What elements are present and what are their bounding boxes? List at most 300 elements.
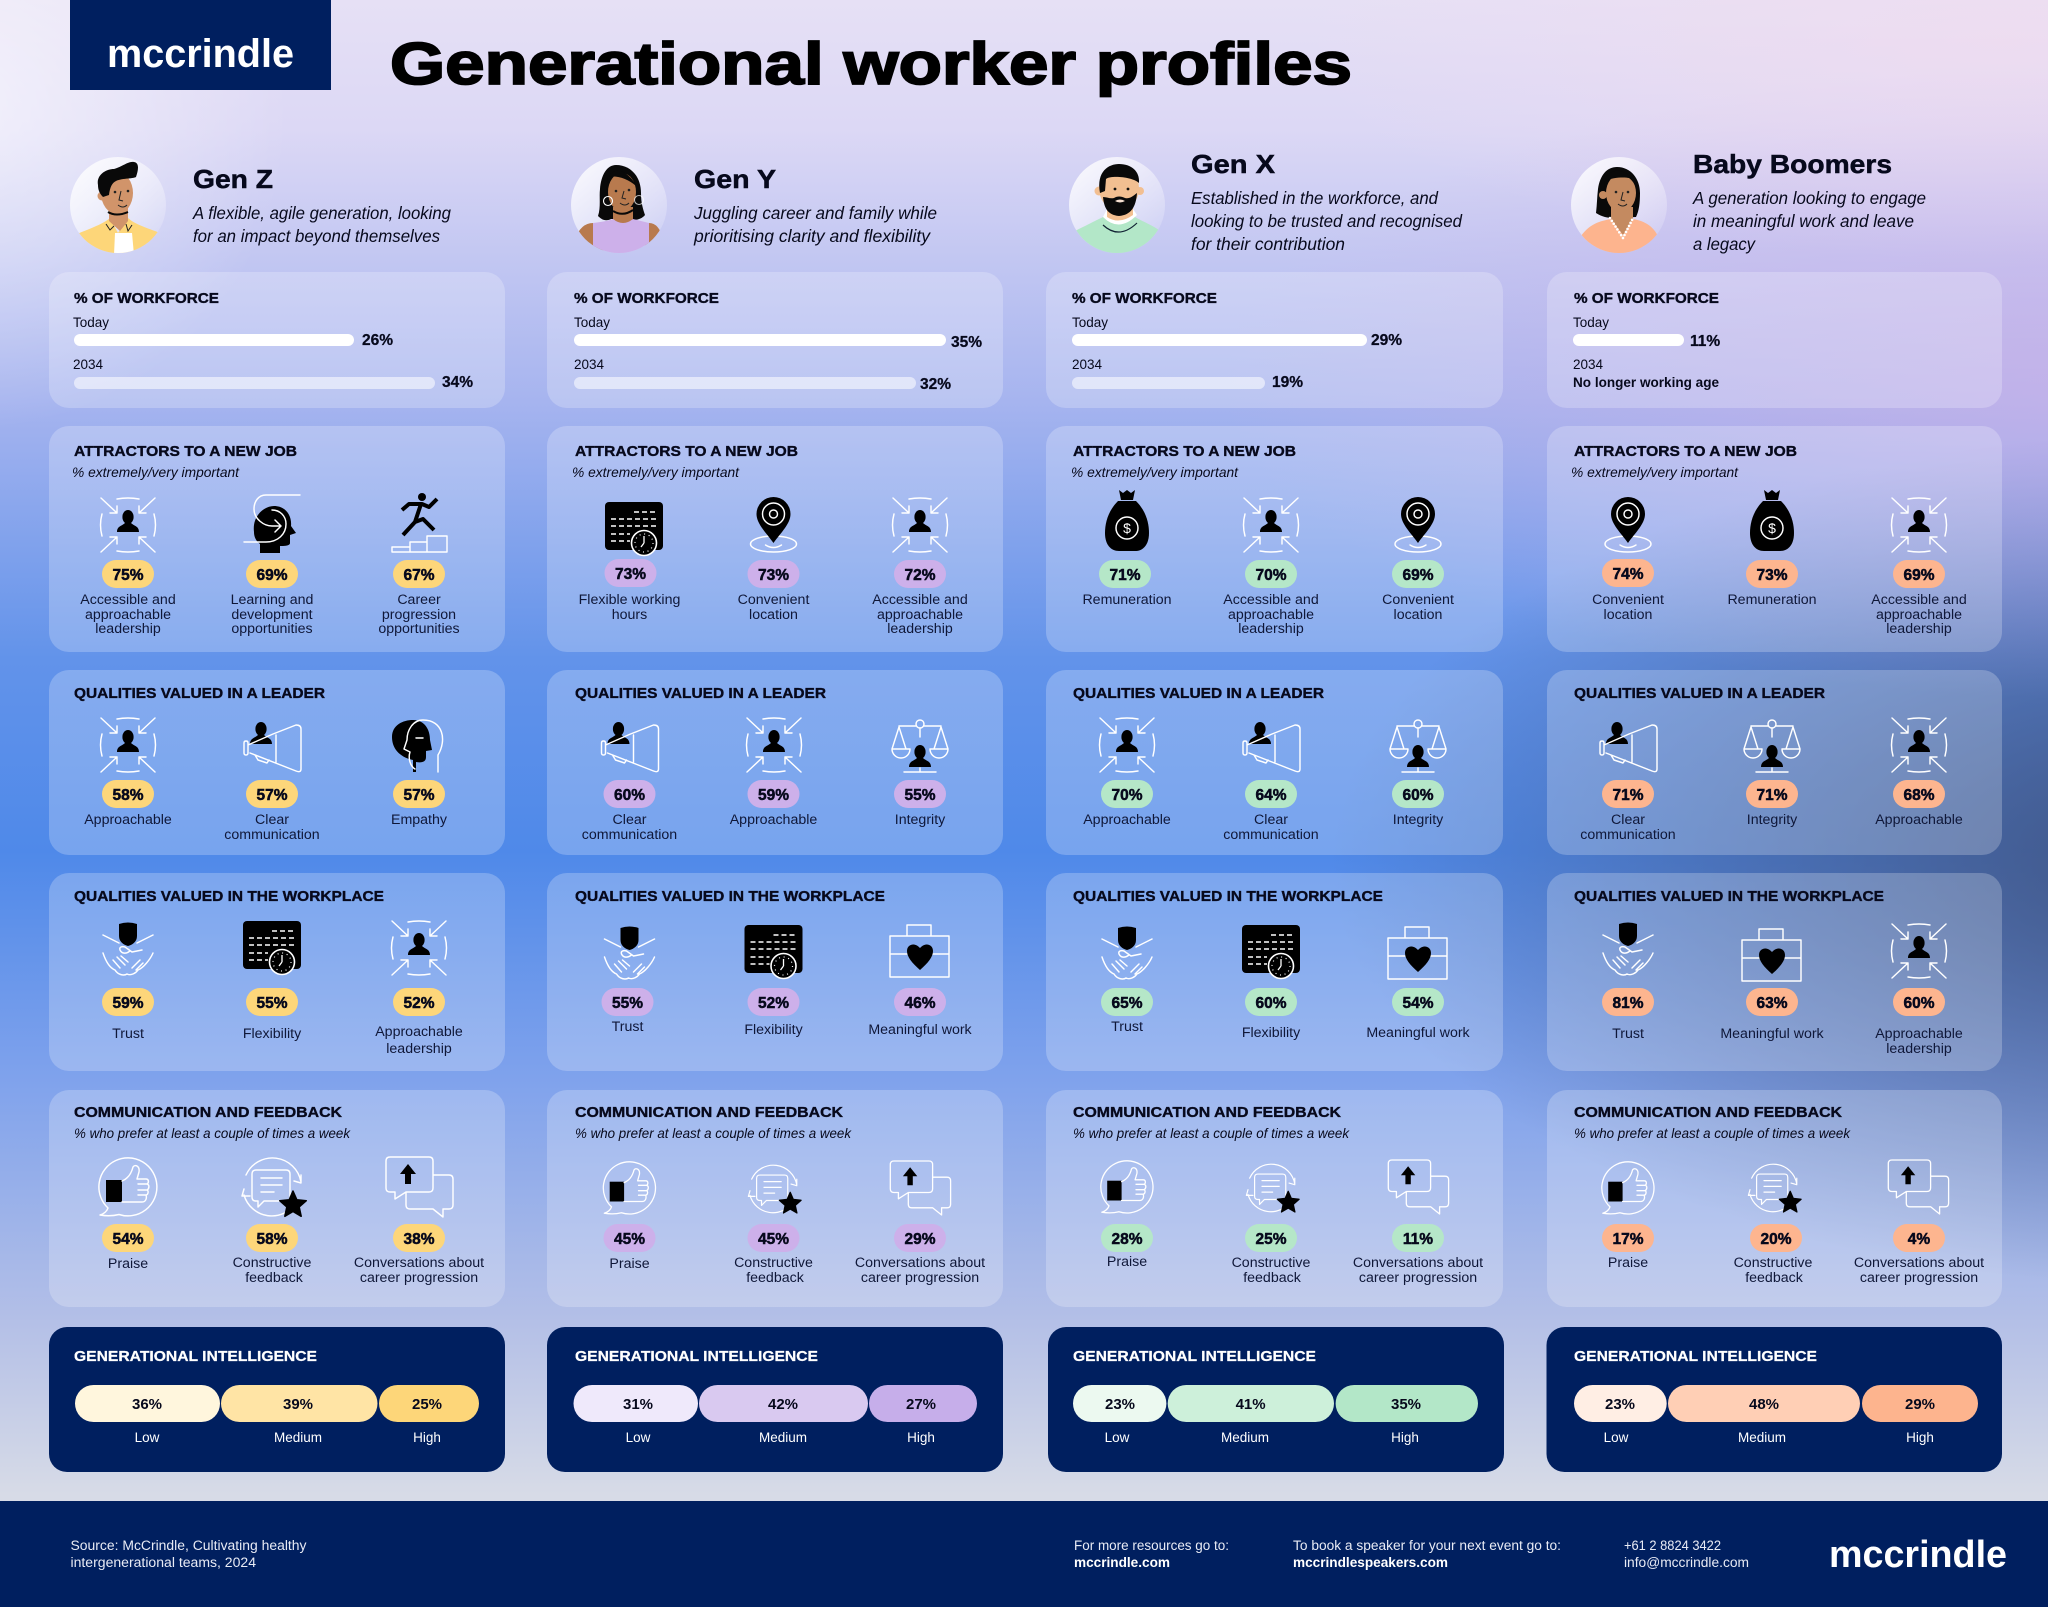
segment: low: 23%	[1605, 1396, 1635, 1413]
item: clear communication: Clear	[255, 812, 289, 828]
panel: workplace qualities	[1046, 873, 1503, 1071]
item: flexibility	[243, 921, 302, 1042]
source note: Source: McCrindle, Cultivating healthy	[70, 1538, 307, 1553]
item: approachable leadership	[375, 921, 463, 1057]
subheading: % extremely/very important	[1071, 464, 1239, 480]
contact details	[1624, 1538, 1749, 1570]
item: career conversations	[354, 1157, 484, 1286]
item: trust: Trust	[1612, 1026, 1644, 1042]
item: trust: Trust	[1111, 1019, 1143, 1035]
heading: COMMUNICATION AND FEEDBACK	[1073, 1105, 1342, 1121]
item: accessible leadership: leadership	[95, 621, 161, 637]
segment: medium: 42%	[768, 1396, 798, 1413]
value: 29%	[1371, 332, 1402, 349]
label: 2034: 2034	[1072, 357, 1103, 372]
panel: generational intelligence	[547, 1327, 1003, 1472]
item: approachable: Approachable	[1083, 812, 1171, 828]
item: praise: 17%	[1612, 1231, 1644, 1248]
item: accessible leadership: 69%	[1903, 567, 1935, 584]
heading: QUALITIES VALUED IN THE WORKPLACE	[575, 889, 885, 905]
item: career progression: Career	[397, 592, 441, 608]
item: trust: 81%	[1612, 995, 1644, 1012]
item: approachable: 58%	[112, 787, 144, 804]
subheading: % extremely/very important	[572, 464, 740, 480]
segment: high: 27%	[906, 1396, 936, 1413]
segment: high: High	[907, 1430, 935, 1445]
heading: % OF WORKFORCE	[74, 291, 219, 307]
item: career conversations: Conversations about	[354, 1255, 484, 1271]
panel: attractors	[49, 426, 505, 652]
resources link	[1074, 1538, 1229, 1570]
subheading: % who prefer at least a couple of times a week	[1574, 1125, 1851, 1141]
segment: medium	[221, 1385, 378, 1445]
item: remuneration: Remuneration	[1727, 592, 1817, 608]
item: approachable: Approachable	[730, 812, 817, 828]
item: constructive feedback: Constructive	[734, 1255, 813, 1271]
item: meaningful work: Meaningful work	[1366, 1025, 1471, 1041]
item: clear communication: 71%	[1612, 787, 1644, 804]
panel: % of workforce	[1046, 272, 1503, 408]
segment: medium	[699, 1385, 868, 1445]
item: empathy: Empathy	[391, 812, 448, 828]
description: in meaningful work and leave	[1693, 211, 1914, 231]
item: career conversations: 38%	[403, 1231, 435, 1248]
header logo	[70, 0, 331, 90]
item: trust: 55%	[612, 995, 643, 1012]
segment: high: High	[413, 1430, 441, 1445]
item: accessible leadership: 70%	[1255, 567, 1287, 584]
item: trust	[1101, 926, 1153, 1035]
item: remuneration	[1082, 490, 1172, 608]
column: Gen Z	[49, 157, 505, 1472]
item: praise: 54%	[112, 1231, 144, 1248]
segment: low	[1073, 1385, 1166, 1445]
segment: high	[379, 1385, 479, 1445]
heading: COMMUNICATION AND FEEDBACK	[575, 1105, 844, 1121]
description: Juggling career and family while	[693, 203, 937, 223]
segment: high: 29%	[1905, 1396, 1935, 1413]
subheading: % who prefer at least a couple of times a week	[575, 1125, 852, 1141]
item: constructive feedback: 58%	[256, 1231, 288, 1248]
item: praise	[1602, 1162, 1654, 1271]
subheading: % who prefer at least a couple of times a week	[1073, 1125, 1350, 1141]
item: accessible leadership	[80, 498, 176, 637]
item: approachable	[730, 718, 817, 828]
item: approachable leadership: leadership	[386, 1041, 452, 1057]
item: praise: 45%	[614, 1231, 645, 1248]
item: convenient location: 69%	[1402, 567, 1434, 584]
item: convenient location: Convenient	[1592, 592, 1664, 608]
item: career conversations: 29%	[904, 1231, 936, 1248]
item: approachable leadership: leadership	[1886, 1041, 1952, 1057]
item: constructive feedback: 45%	[758, 1231, 789, 1248]
item: clear communication: communication	[1223, 827, 1319, 843]
item: praise: 28%	[1111, 1231, 1143, 1248]
segment: medium: 41%	[1236, 1396, 1266, 1413]
panel: generational intelligence	[1048, 1327, 1504, 1472]
value: 19%	[1272, 374, 1303, 391]
item: constructive feedback: feedback	[245, 1270, 304, 1286]
value: 32%	[920, 376, 951, 393]
description: Established in the workforce, and	[1191, 188, 1439, 208]
item: clear communication: 60%	[614, 787, 645, 804]
subheading: % extremely/very important	[1571, 464, 1739, 480]
footer	[0, 1501, 2048, 1607]
segment: high	[869, 1385, 977, 1445]
panel: attractors	[1547, 426, 2002, 652]
item: accessible leadership: 75%	[112, 567, 144, 584]
item: convenient location: 73%	[758, 567, 789, 584]
item: approachable leadership: Approachable	[1875, 1026, 1963, 1042]
item: constructive feedback	[1734, 1164, 1813, 1286]
panel: % of workforce	[547, 272, 1003, 408]
panel: communication and feedback	[547, 1090, 1003, 1307]
heading: QUALITIES VALUED IN A LEADER	[74, 686, 326, 702]
item: flexible working hours: hours	[612, 607, 647, 623]
description	[192, 203, 451, 246]
speakers link: To book a speaker for your next event go to:	[1293, 1538, 1561, 1553]
item: career conversations: 11%	[1403, 1231, 1433, 1248]
item: accessible leadership	[1223, 498, 1319, 637]
item: clear communication	[582, 722, 677, 843]
item: flexible working hours: 73%	[615, 566, 646, 583]
speakers link	[1293, 1538, 1561, 1570]
item: meaningful work: 63%	[1756, 995, 1788, 1012]
panel: % of workforce	[1547, 272, 2002, 408]
heading: % OF WORKFORCE	[574, 291, 719, 307]
item: integrity: 71%	[1756, 787, 1788, 804]
label: 2034: 2034	[574, 357, 605, 372]
segment: low	[1574, 1385, 1667, 1445]
panel: leader qualities	[1547, 670, 2002, 855]
item: flexibility	[744, 925, 804, 1038]
description: A flexible, agile generation, looking	[192, 203, 451, 223]
heading: ATTRACTORS TO A NEW JOB	[575, 444, 798, 460]
segment: high: High	[1906, 1430, 1934, 1445]
description: looking to be trusted and recognised	[1191, 211, 1463, 231]
panel: generational intelligence	[1546, 1327, 2002, 1472]
bar: 2034 34%	[74, 377, 435, 389]
item: approachable leadership: Approachable	[375, 1024, 463, 1040]
item: constructive feedback	[734, 1165, 813, 1286]
description	[693, 203, 937, 246]
item: integrity: Integrity	[1747, 812, 1798, 828]
item: integrity	[1744, 720, 1800, 828]
resources link: For more resources go to:	[1074, 1538, 1229, 1553]
contact details: info@mccrindle.com	[1624, 1555, 1749, 1570]
segment: high: High	[1391, 1430, 1419, 1445]
item: remuneration: 73%	[1756, 567, 1788, 584]
bar: today 11%	[1573, 334, 1684, 346]
segment: medium: 39%	[283, 1396, 313, 1413]
panel: leader qualities	[1046, 670, 1503, 855]
segment: low: 31%	[623, 1396, 653, 1413]
bar: today 29%	[1072, 334, 1367, 346]
item: accessible leadership: approachable	[877, 607, 963, 623]
item: constructive feedback: 20%	[1760, 1231, 1792, 1248]
item: career conversations: Conversations about	[1854, 1255, 1984, 1271]
item: learning and development: Learning and	[231, 592, 313, 608]
item: constructive feedback: feedback	[1243, 1270, 1302, 1286]
segment: medium: Medium	[759, 1430, 807, 1445]
item: convenient location: 74%	[1612, 566, 1644, 583]
item: meaningful work: Meaningful work	[1720, 1026, 1825, 1042]
item: accessible leadership: Accessible and	[872, 592, 968, 608]
heading: COMMUNICATION AND FEEDBACK	[1574, 1105, 1843, 1121]
item: convenient location	[1592, 497, 1664, 623]
item: empathy	[391, 720, 448, 828]
heading: GENERATIONAL INTELLIGENCE	[1073, 1349, 1316, 1365]
item: career progression: 67%	[403, 567, 435, 584]
item: constructive feedback	[233, 1158, 312, 1286]
label: today: Today	[1573, 315, 1609, 330]
item: career conversations: career progression	[861, 1270, 979, 1286]
heading: QUALITIES VALUED IN THE WORKPLACE	[74, 889, 384, 905]
item: trust	[602, 926, 654, 1035]
heading: % OF WORKFORCE	[1072, 291, 1217, 307]
column: Gen Y	[547, 157, 1003, 1472]
item: approachable: Approachable	[1875, 812, 1963, 828]
item: meaningful work: Meaningful work	[868, 1022, 973, 1038]
item: accessible leadership: approachable	[1228, 607, 1314, 623]
panel: leader qualities	[49, 670, 505, 855]
panel: leader qualities	[547, 670, 1003, 855]
item: career progression: opportunities	[378, 621, 460, 637]
item: empathy: 57%	[403, 787, 435, 804]
item: constructive feedback: Constructive	[233, 1255, 312, 1271]
item: accessible leadership	[872, 498, 968, 637]
panel: attractors	[1046, 426, 1503, 652]
heading: GENERATIONAL INTELLIGENCE	[575, 1349, 818, 1365]
segment: high: 35%	[1391, 1396, 1421, 1413]
item: clear communication	[1580, 722, 1676, 843]
title: Generational worker profiles	[390, 31, 1352, 97]
description: prioritising clarity and flexibility	[693, 226, 931, 246]
item: constructive feedback: Constructive	[1232, 1255, 1311, 1271]
item: flexibility: 55%	[256, 995, 288, 1012]
segment: low: 23%	[1105, 1396, 1135, 1413]
description: for their contribution	[1191, 234, 1345, 254]
panel: % of workforce	[49, 272, 505, 408]
panel: communication and feedback	[49, 1090, 505, 1307]
item: trust: Trust	[612, 1019, 643, 1035]
item: convenient location: location	[1394, 607, 1442, 623]
item: meaningful work: 54%	[1402, 995, 1434, 1012]
item: accessible leadership: 72%	[904, 567, 936, 584]
description: for an impact beyond themselves	[193, 226, 440, 246]
segment: medium	[1668, 1385, 1860, 1445]
item: convenient location	[738, 497, 809, 623]
item: convenient location: Convenient	[1382, 592, 1454, 608]
item: approachable	[84, 718, 172, 828]
item: accessible leadership	[1871, 498, 1967, 637]
heading: ATTRACTORS TO A NEW JOB	[74, 444, 297, 460]
value: 26%	[362, 332, 393, 349]
item: accessible leadership: Accessible and	[1223, 592, 1319, 608]
item: career conversations	[1854, 1160, 1984, 1286]
item: trust	[102, 922, 154, 1042]
heading: % OF WORKFORCE	[1574, 291, 1719, 307]
column: Baby Boomers	[1546, 149, 2002, 1472]
segment: high	[1862, 1385, 1978, 1445]
heading: QUALITIES VALUED IN A LEADER	[1574, 686, 1826, 702]
avatar: Gen Z	[70, 157, 168, 255]
item: praise	[99, 1158, 157, 1272]
heading: ATTRACTORS TO A NEW JOB	[1574, 444, 1797, 460]
item: career conversations	[855, 1161, 985, 1286]
heading: QUALITIES VALUED IN A LEADER	[1073, 686, 1325, 702]
item: constructive feedback: Constructive	[1734, 1255, 1813, 1271]
item: learning and development: 69%	[256, 567, 288, 584]
item: meaningful work	[868, 925, 973, 1038]
item: integrity: Integrity	[895, 812, 946, 828]
panel: workplace qualities	[1547, 873, 2002, 1071]
item: career conversations: career progression	[1359, 1270, 1477, 1286]
item: flexibility: Flexibility	[243, 1026, 302, 1042]
bar: 2034 32%	[574, 377, 916, 389]
panel: communication and feedback	[1547, 1090, 2002, 1307]
item: career conversations	[1353, 1160, 1483, 1286]
value: 34%	[442, 374, 473, 391]
item: trust: 59%	[112, 995, 144, 1012]
item: clear communication: Clear	[613, 812, 647, 828]
description	[1191, 188, 1463, 254]
contact details: +61 2 8824 3422	[1624, 1538, 1721, 1553]
segment: low: 36%	[132, 1396, 162, 1413]
item: learning and development	[231, 495, 313, 637]
item: clear communication	[224, 722, 320, 843]
segment: medium	[1168, 1385, 1334, 1445]
segment: high	[1336, 1385, 1478, 1445]
item: trust: Trust	[112, 1026, 144, 1042]
item: flexibility	[1242, 925, 1301, 1041]
subheading: % who prefer at least a couple of times a week	[74, 1125, 351, 1141]
resources link: mccrindle.com	[1074, 1555, 1170, 1570]
item: convenient location	[1382, 497, 1454, 623]
name: Gen Y	[694, 164, 776, 194]
segment: low: Low	[1105, 1430, 1130, 1445]
item: accessible leadership: leadership	[1886, 621, 1952, 637]
bar: today 26%	[74, 334, 354, 346]
segment: low: Low	[626, 1430, 651, 1445]
value: 11%	[1690, 333, 1720, 350]
heading: COMMUNICATION AND FEEDBACK	[74, 1105, 343, 1121]
header logo: mccrindle	[107, 32, 294, 76]
label: today: Today	[1072, 315, 1108, 330]
item: trust	[1602, 922, 1654, 1042]
item: flexibility: Flexibility	[744, 1022, 804, 1038]
note: no longer working age: No longer working age	[1573, 375, 1719, 390]
segment: medium: Medium	[274, 1430, 322, 1445]
label: 2034: 2034	[1573, 357, 1604, 372]
item: convenient location: location	[749, 607, 798, 623]
description	[1692, 188, 1926, 254]
item: accessible leadership: leadership	[887, 621, 953, 637]
heading: QUALITIES VALUED IN THE WORKPLACE	[1574, 889, 1884, 905]
item: learning and development: development	[231, 607, 313, 623]
item: accessible leadership: Accessible and	[80, 592, 176, 608]
panel: communication and feedback	[1046, 1090, 1503, 1307]
description: a legacy	[1693, 234, 1756, 254]
bar: today 35%	[574, 334, 946, 346]
item: clear communication: Clear	[1611, 812, 1645, 828]
item: integrity	[892, 720, 948, 828]
speakers link: mccrindlespeakers.com	[1293, 1555, 1448, 1570]
bar: 2034 19%	[1072, 377, 1265, 389]
heading: GENERATIONAL INTELLIGENCE	[1574, 1349, 1817, 1365]
panel: workplace qualities	[49, 873, 505, 1071]
segment: low	[574, 1385, 698, 1445]
item: remuneration	[1727, 490, 1817, 608]
name: Gen Z	[193, 164, 273, 194]
item: flexibility: 52%	[758, 995, 789, 1012]
item: praise	[603, 1162, 656, 1272]
item: praise: Praise	[1608, 1255, 1648, 1271]
item: approachable: 70%	[1111, 787, 1143, 804]
item: trust: 65%	[1111, 995, 1143, 1012]
item: flexible working hours: Flexible working	[579, 592, 680, 608]
name: Baby Boomers	[1693, 149, 1892, 179]
item: career conversations: Conversations about	[855, 1255, 985, 1271]
item: integrity: Integrity	[1393, 812, 1444, 828]
item: integrity: 60%	[1402, 787, 1434, 804]
segment: low: Low	[1604, 1430, 1629, 1445]
item: constructive feedback	[1232, 1164, 1311, 1286]
column: Gen X	[1046, 149, 1504, 1472]
segment: high: 25%	[412, 1396, 442, 1413]
item: clear communication: communication	[582, 827, 677, 843]
item: approachable: 59%	[758, 787, 789, 804]
item: clear communication: 64%	[1255, 787, 1287, 804]
item: approachable: 68%	[1903, 787, 1935, 804]
item: praise	[1101, 1161, 1153, 1270]
item: praise: Praise	[609, 1256, 650, 1272]
item: clear communication	[1223, 722, 1319, 843]
item: career progression	[378, 493, 460, 637]
item: approachable	[1875, 718, 1963, 828]
item: approachable leadership: 60%	[1903, 995, 1935, 1012]
item: praise: Praise	[108, 1256, 148, 1272]
value: 35%	[951, 334, 982, 351]
item: flexibility: Flexibility	[1242, 1025, 1301, 1041]
label: today: Today	[73, 315, 109, 330]
item: convenient location: Convenient	[738, 592, 809, 608]
item: accessible leadership: approachable	[85, 607, 171, 623]
item: meaningful work: 46%	[904, 995, 936, 1012]
heading: GENERATIONAL INTELLIGENCE	[74, 1349, 317, 1365]
panel: workplace qualities	[547, 873, 1003, 1071]
item: constructive feedback: feedback	[1745, 1270, 1804, 1286]
item: approachable leadership: 52%	[403, 995, 435, 1012]
item: clear communication: communication	[224, 827, 320, 843]
item: career conversations: Conversations about	[1353, 1255, 1483, 1271]
avatar: Baby Boomers	[1571, 157, 1667, 255]
item: praise: Praise	[1107, 1254, 1147, 1270]
item: accessible leadership: approachable	[1876, 607, 1962, 623]
segment: medium: Medium	[1738, 1430, 1786, 1445]
segment: low	[75, 1385, 220, 1445]
footer logo: mccrindle	[1829, 1534, 2007, 1576]
heading: ATTRACTORS TO A NEW JOB	[1073, 444, 1296, 460]
heading: QUALITIES VALUED IN THE WORKPLACE	[1073, 889, 1383, 905]
item: constructive feedback: feedback	[746, 1270, 805, 1286]
item: approachable leadership	[1875, 924, 1963, 1057]
item: clear communication: 57%	[256, 787, 288, 804]
item: meaningful work	[1720, 929, 1825, 1042]
item: integrity	[1390, 720, 1446, 828]
item: clear communication: communication	[1580, 827, 1676, 843]
description: A generation looking to engage	[1692, 188, 1926, 208]
